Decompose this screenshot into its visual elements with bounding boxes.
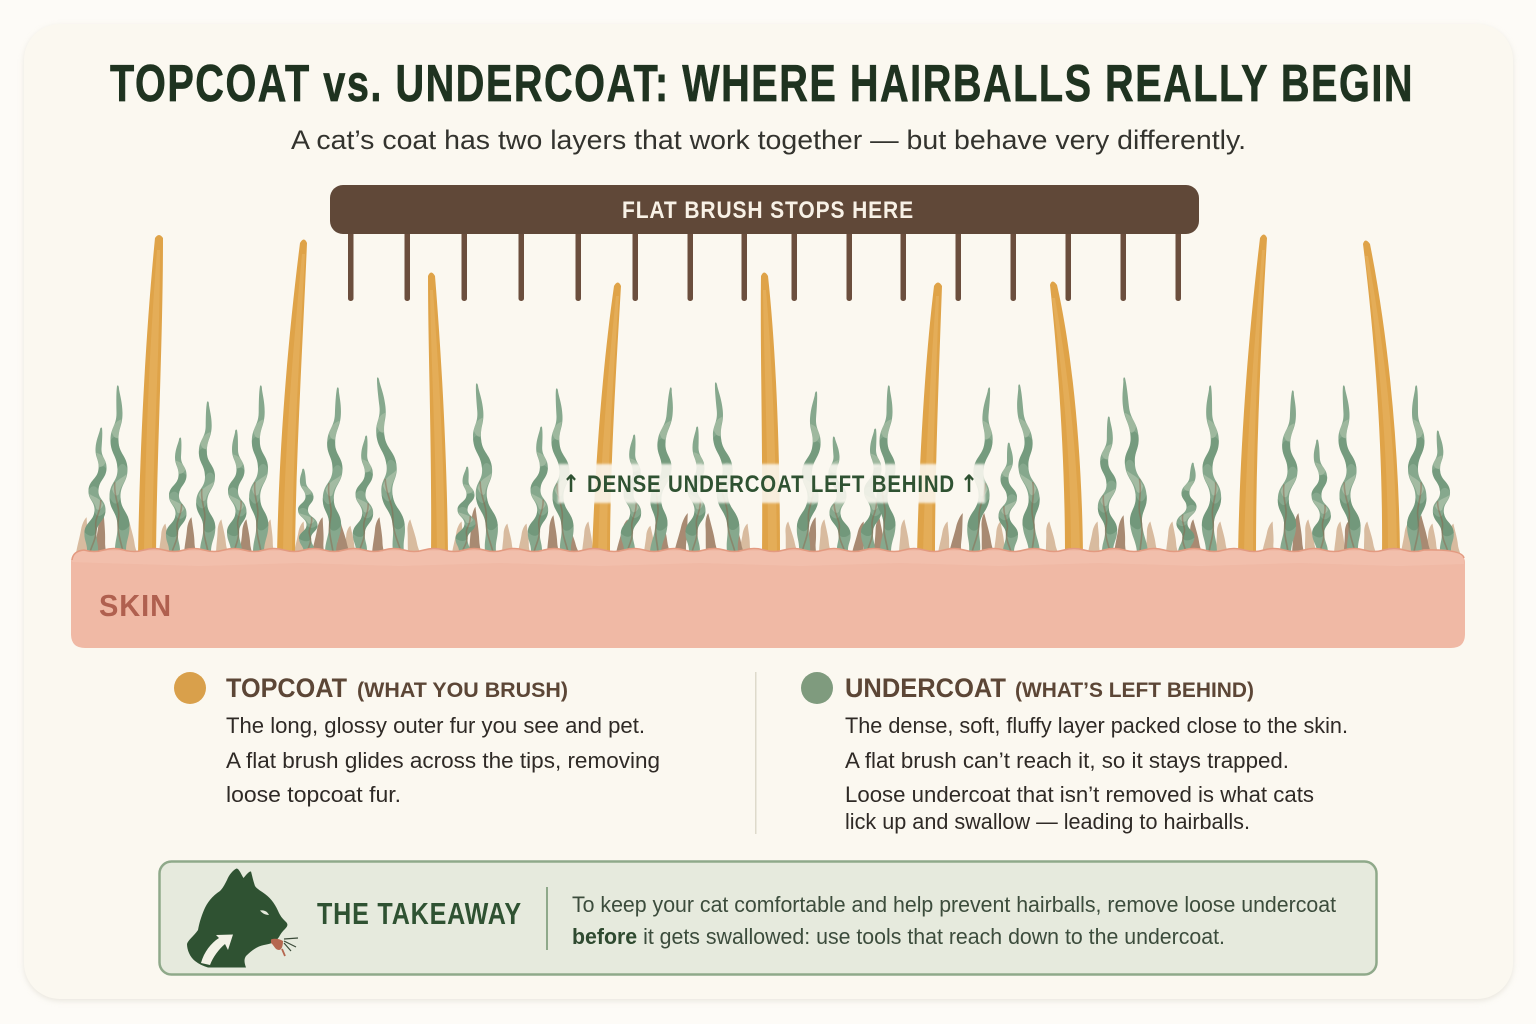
undercoat short tufts	[76, 505, 1460, 553]
undercoat heading: UNDERCOAT	[845, 673, 1006, 703]
icon: undercoat dot	[801, 672, 833, 704]
topcoat description: loose topcoat fur.	[226, 782, 401, 807]
undercoat label: ↑	[562, 470, 580, 498]
takeaway text: before it gets swallowed: use tools that reach down to the undercoat.	[572, 924, 1225, 949]
panel: topcoat legend	[174, 672, 660, 807]
topcoat description: The long, glossy outer fur you see and pet.	[226, 713, 645, 738]
undercoat wavy strands	[83, 377, 1455, 552]
takeaway text: To keep your cat comfortable and help prevent hairballs, remove loose undercoat	[572, 892, 1336, 917]
undercoat description: lick up and swallow — leading to hairballs.	[845, 809, 1250, 834]
undercoat heading	[845, 673, 1254, 703]
icon: cat licking fur	[187, 868, 298, 968]
icon: eye	[260, 910, 269, 915]
panel: takeaway	[160, 862, 1376, 974]
undercoat label	[558, 464, 985, 503]
icon: whiskers	[284, 938, 298, 951]
topcoat heading: (WHAT YOU BRUSH)	[357, 679, 568, 702]
subtitle: A cat’s coat has two layers that work together — but behave very differently.	[291, 125, 1246, 155]
icon: curved arrow	[201, 934, 233, 965]
brush teeth	[348, 230, 1181, 301]
takeaway heading: THE TAKEAWAY	[317, 896, 522, 931]
undercoat label: DENSE UNDERCOAT LEFT BEHIND	[587, 471, 955, 498]
undercoat description	[845, 713, 1348, 834]
undercoat description: Loose undercoat that isn’t removed is what cats	[845, 782, 1314, 807]
skin layer	[71, 548, 1465, 648]
topcoat guard hairs	[138, 234, 1400, 555]
topcoat heading	[226, 673, 568, 703]
undercoat description: The dense, soft, fluffy layer packed close to the skin.	[845, 713, 1348, 738]
brush handle	[330, 185, 1199, 234]
flat brush	[330, 185, 1199, 301]
brush label: FLAT BRUSH STOPS HERE	[622, 197, 914, 224]
icon: tongue	[271, 939, 283, 950]
icon: topcoat dot	[174, 672, 206, 704]
topcoat description: A flat brush glides across the tips, removing	[226, 748, 660, 773]
undercoat description: A flat brush can’t reach it, so it stays trapped.	[845, 748, 1289, 773]
undercoat label: ↑	[960, 470, 978, 498]
topcoat heading: TOPCOAT	[226, 673, 347, 703]
panel: undercoat legend	[801, 672, 1348, 834]
skin label: SKIN	[99, 588, 172, 623]
undercoat heading: (WHAT’S LEFT BEHIND)	[1015, 679, 1254, 702]
topcoat description	[226, 713, 660, 807]
takeaway text	[572, 892, 1336, 949]
